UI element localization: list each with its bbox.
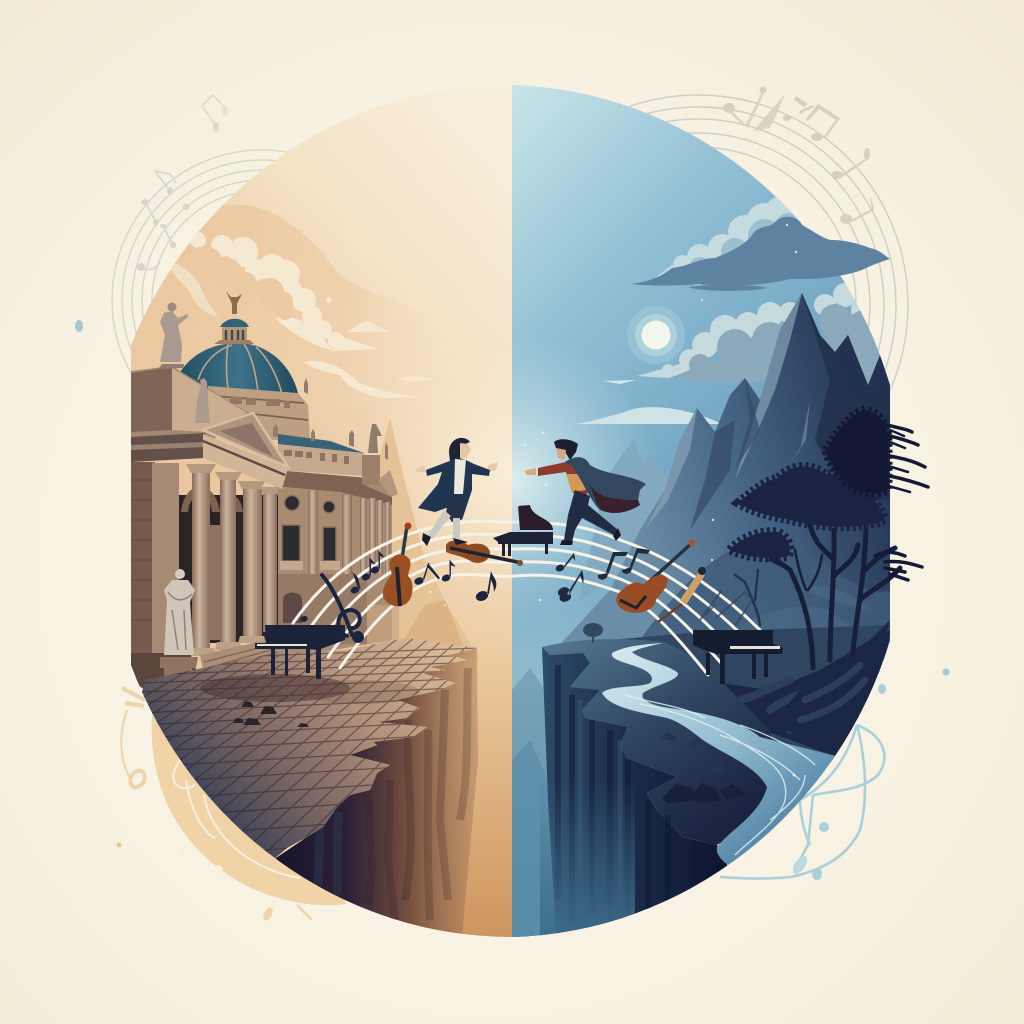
arches (181, 486, 243, 512)
window balconies (280, 561, 340, 570)
center grand piano (493, 505, 553, 556)
wing block (362, 455, 380, 485)
statue on roof left (158, 302, 188, 369)
faint floating note top left (202, 95, 228, 132)
wing windows (282, 496, 336, 561)
sky speckles (701, 224, 797, 301)
pale swirl on blob (173, 760, 300, 878)
left building (131, 291, 399, 695)
right distant mountains (512, 440, 668, 937)
wind-blown trees (730, 410, 928, 668)
notes on right staff (556, 548, 650, 602)
paved plaza (0, 250, 900, 900)
steps (200, 640, 280, 680)
foreground rocks at tree base (770, 630, 890, 745)
lower wing (275, 574, 367, 644)
slanted cornice (203, 434, 288, 489)
fronds past circle edge (875, 424, 928, 580)
right figure with cape (524, 439, 646, 545)
dark cloud spilling past circle (630, 217, 890, 286)
notes on left staff (300, 550, 496, 622)
decorative blue swirl lower right (720, 684, 886, 880)
main mountain range (555, 293, 895, 680)
staff arcs and notes top left (112, 150, 412, 450)
base (131, 653, 200, 690)
musical staff bridge (293, 521, 760, 675)
dome (180, 319, 298, 395)
decorative leaves lower left (121, 688, 312, 922)
winding river (602, 643, 840, 868)
wing columns (308, 490, 390, 574)
upright violin (383, 522, 412, 606)
right wing wall (275, 470, 392, 660)
scattered dots (75, 320, 950, 848)
tree canopies with fringed edges (730, 410, 888, 558)
wing door (283, 592, 302, 623)
left grand piano (255, 625, 345, 679)
right ground behind river (600, 625, 890, 760)
left distant mountains (360, 418, 480, 660)
left brick wall (131, 462, 155, 653)
main split circle scene (131, 85, 890, 937)
staff arcs and notes top right (488, 86, 908, 515)
sparkle dots (429, 432, 796, 776)
small pediment (378, 470, 398, 497)
horizontal violin (446, 540, 523, 566)
decorative beige blob lower left (152, 700, 346, 905)
left tan cloud mass (170, 204, 389, 356)
right cloud upper layers (656, 197, 802, 285)
portico columns (186, 464, 280, 656)
small distant tree (583, 623, 603, 643)
pilaster (152, 463, 179, 653)
roof statues (273, 378, 388, 460)
upper left block (131, 366, 250, 445)
pediment (203, 413, 288, 467)
treble clef (322, 575, 362, 641)
balustrade (278, 444, 364, 476)
tree trunks (735, 525, 900, 668)
dark rocky bank (724, 620, 890, 756)
big statue (158, 569, 198, 695)
lower right cloud (575, 283, 890, 424)
drum of dome (208, 386, 310, 440)
plaza tile grid (0, 250, 900, 900)
right cliff tops (542, 639, 780, 845)
cloud underside wisp (688, 285, 768, 291)
rocks on right cliff top (660, 732, 746, 804)
small statue (195, 378, 210, 423)
moon (627, 306, 685, 364)
right horizon glow (512, 358, 641, 606)
right cliff faces (540, 647, 735, 937)
back door shadow (178, 495, 278, 643)
portico entablature (131, 433, 205, 462)
left sand lower (380, 652, 512, 937)
right grand piano (693, 630, 783, 684)
right low haze (512, 570, 632, 940)
right violin (616, 540, 696, 613)
flying baton (658, 567, 706, 622)
left horizon glow (401, 408, 512, 574)
left sky (120, 80, 512, 680)
right sky (512, 80, 897, 680)
left cream clouds (168, 232, 434, 398)
faint notes near right piano (700, 590, 752, 626)
statue on dome (226, 291, 242, 314)
stairs at right (367, 605, 399, 643)
teal roof strip (278, 434, 364, 453)
left figure in frock coat (415, 438, 498, 546)
left cliff face (250, 648, 478, 937)
